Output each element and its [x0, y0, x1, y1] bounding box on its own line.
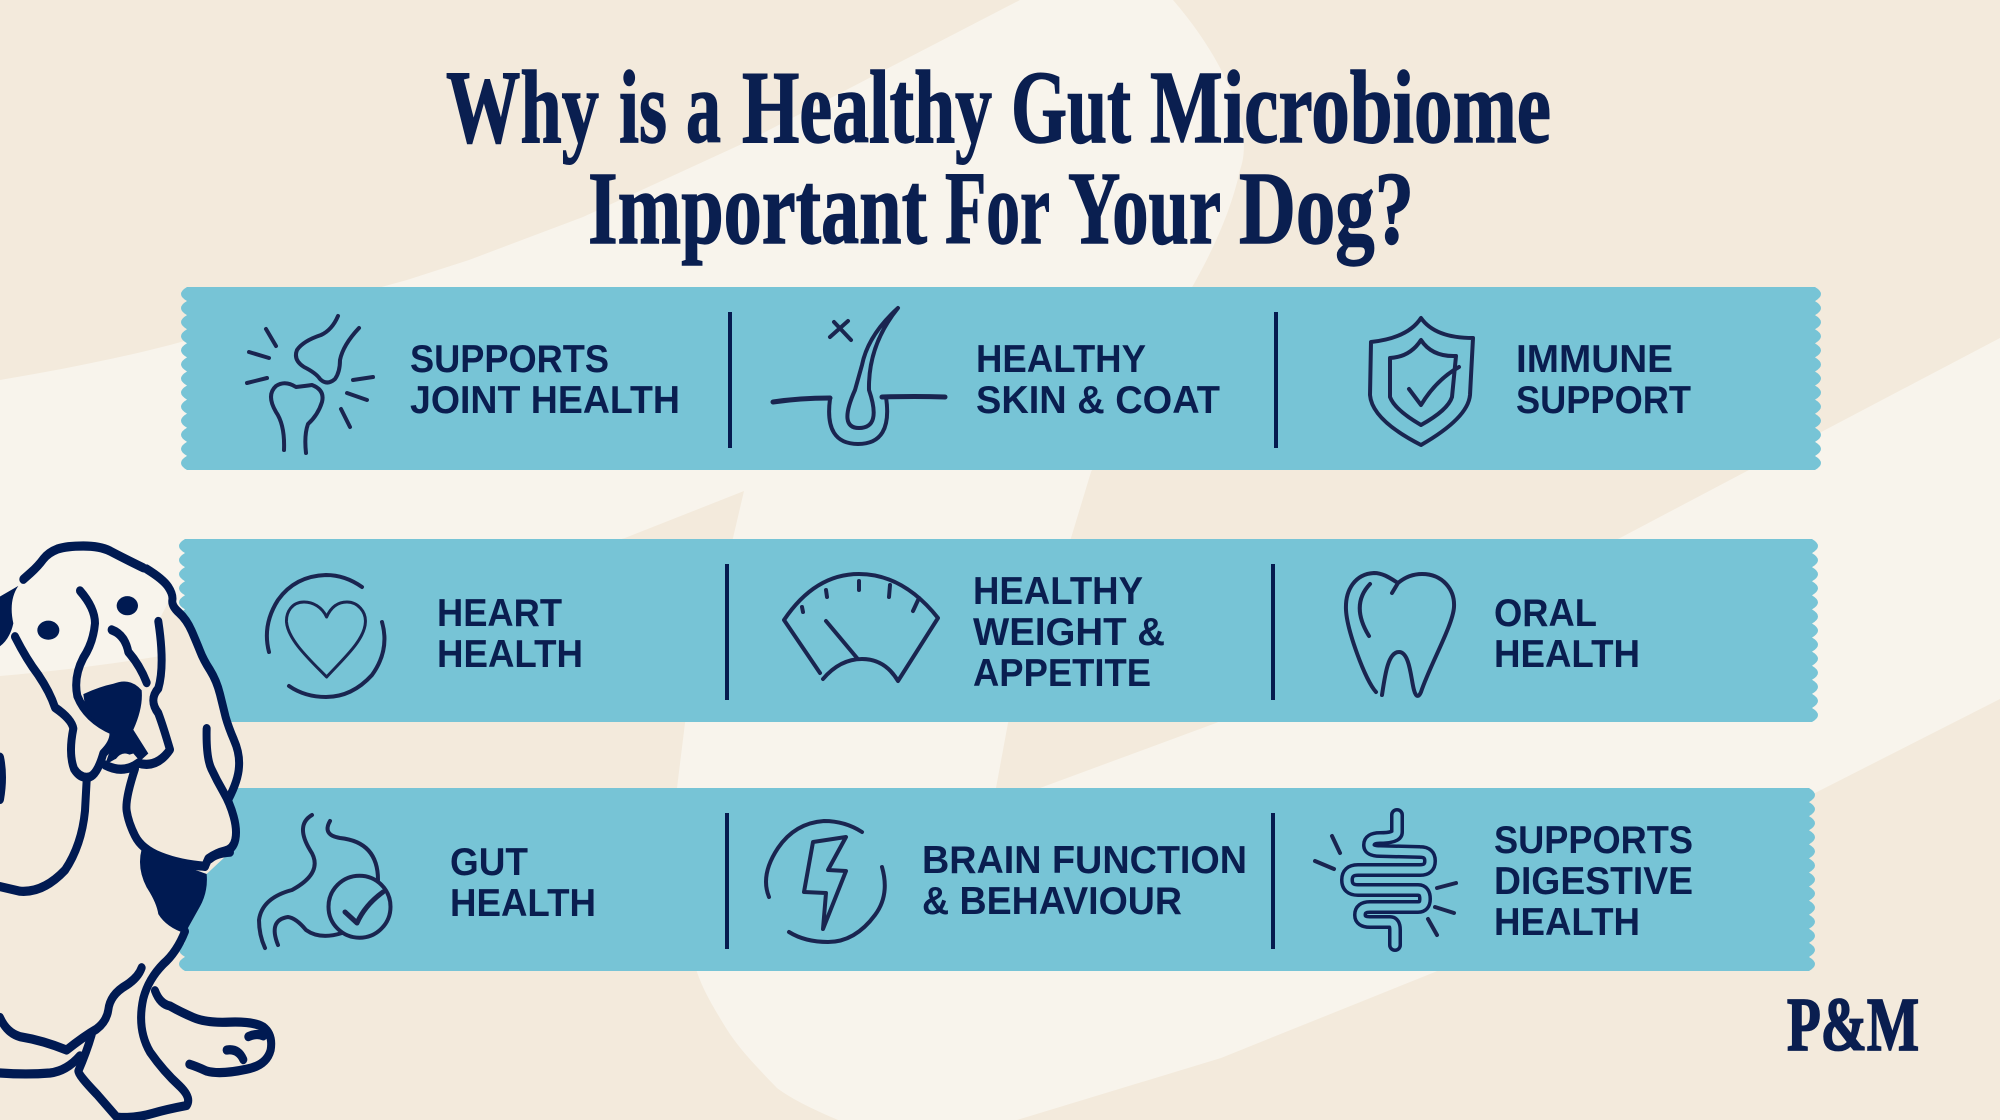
text: brain function and behaviour: BRAIN FUNCTION — [922, 839, 1247, 882]
icon: joint — [247, 316, 373, 453]
text: healthy weight and appetite: HEALTHY — [973, 570, 1143, 613]
text: gut health: HEALTH — [450, 882, 596, 925]
text: immune support: IMMUNE — [1516, 338, 1673, 381]
title: is — [619, 50, 667, 165]
text: heart health: HEART — [437, 592, 562, 635]
panel: row 2 ribbon — [179, 539, 1818, 722]
text: brain function and behaviour: & BEHAVIOUR — [922, 880, 1182, 923]
text: heart health: HEALTH — [437, 633, 583, 676]
icon: weight scale — [784, 574, 938, 681]
text: heart health — [437, 592, 583, 676]
title: a — [686, 50, 721, 165]
text: gut health: GUT — [450, 841, 528, 884]
icon: hair follicle — [773, 308, 945, 444]
text: healthy skin and coat — [976, 338, 1220, 422]
text: oral health: HEALTH — [1494, 633, 1640, 676]
logo: P&M: P&M — [1787, 983, 1919, 1067]
title: Dog? — [1239, 151, 1414, 266]
text: healthy weight and appetite: APPETITE — [973, 652, 1151, 695]
title: Your — [1068, 151, 1221, 266]
text: supports joint health: SUPPORTS — [410, 338, 609, 381]
text: oral health: ORAL — [1494, 592, 1597, 635]
title: Microbiome — [1150, 50, 1551, 165]
title: Gut — [1011, 50, 1131, 165]
icon: heart — [267, 575, 384, 697]
text: healthy weight and appetite: WEIGHT & — [973, 611, 1165, 654]
text: supports joint health — [410, 338, 680, 422]
icon: intestines — [1315, 815, 1456, 945]
ribbon 2 background — [179, 539, 1818, 722]
text: immune support — [1516, 338, 1691, 422]
text: supports digestive health: SUPPORTS — [1494, 819, 1693, 862]
icon: brain lightning — [766, 821, 885, 942]
title: Important — [588, 151, 927, 266]
text: brain function and behaviour — [922, 839, 1247, 923]
text: gut health — [450, 841, 596, 925]
ribbon 3 background — [179, 788, 1815, 971]
text: supports digestive health: HEALTH — [1494, 901, 1640, 944]
icon: gut — [259, 815, 390, 948]
text: healthy skin and coat: SKIN & COAT — [976, 379, 1220, 422]
title: Healthy — [742, 50, 992, 165]
text: supports digestive health: DIGESTIVE — [1494, 860, 1693, 903]
text: healthy weight and appetite — [973, 570, 1165, 695]
panel: row 3 ribbon — [179, 788, 1815, 971]
text: immune support: SUPPORT — [1516, 379, 1691, 422]
illustration: basset hound — [0, 546, 271, 1117]
text: supports digestive health — [1494, 819, 1693, 944]
ribbon 1 background — [181, 287, 1821, 470]
icon: tooth — [1346, 573, 1454, 696]
text: oral health — [1494, 592, 1640, 676]
text: healthy skin and coat: HEALTHY — [976, 338, 1146, 381]
icon: shield — [1370, 318, 1473, 445]
title: Why — [446, 50, 599, 165]
title: For — [945, 151, 1050, 266]
panel: row 1 ribbon — [181, 287, 1821, 470]
text: supports joint health: JOINT HEALTH — [410, 379, 680, 422]
title — [446, 50, 1551, 266]
